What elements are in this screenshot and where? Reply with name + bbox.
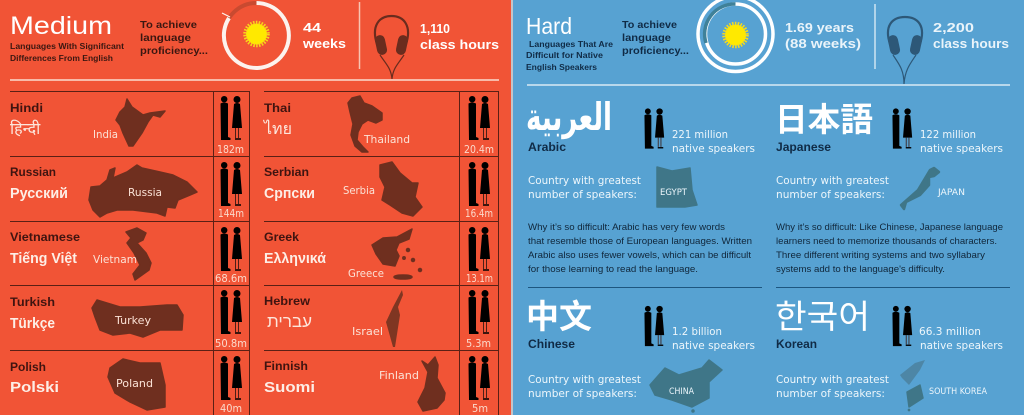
block: Arabic: that resemble those of European languages. Written <box>528 236 752 247</box>
text: to achieve proficiency: To achieve <box>140 19 197 31</box>
row: Serbian: Српски <box>264 185 315 202</box>
row: Thai: 20.4m <box>464 143 494 156</box>
block: Chinese: 1.2 billion <box>672 325 722 338</box>
row: Thai: Thai <box>264 103 291 115</box>
block: Arabic: العربية <box>526 95 612 139</box>
row: Hindi: Hindi <box>10 103 43 115</box>
stat: class hours <box>420 21 499 52</box>
block: Arabic: native speakers <box>672 142 755 155</box>
row: Vietnamese <box>10 227 247 285</box>
block: Korean: Korean <box>776 337 817 351</box>
row: Hebrew: Israel <box>352 326 383 338</box>
block: Arabic: Country with greatest <box>528 174 642 187</box>
row: Polish <box>10 356 242 415</box>
block: Arabic: number of speakers: <box>528 188 637 201</box>
row: Polish: Polski <box>10 379 59 396</box>
row: Hindi: 182m <box>217 143 244 156</box>
block: Korean: native speakers <box>920 339 1003 352</box>
stat: class hours: 1,110 <box>420 21 450 36</box>
block: Chinese: native speakers <box>672 339 755 352</box>
block: Chinese: Country with greatest <box>528 373 642 386</box>
block: Japanese: Country with greatest <box>776 174 890 187</box>
block: Korean: 66.3 million <box>919 325 981 338</box>
block: Chinese: number of speakers: <box>528 387 637 400</box>
stat: class hours: class hours <box>420 37 499 52</box>
row: Hindi: हिन्दी <box>10 119 41 138</box>
row: Serbian: Serbian <box>264 167 309 179</box>
stat: 44 weeks: weeks <box>302 36 346 51</box>
block: Japanese: 122 million <box>920 128 976 141</box>
subtitle: medium <box>10 42 124 63</box>
block: Japanese: Three different writing systems and two syllabary <box>776 250 985 261</box>
title: Medium: Medium <box>10 12 112 40</box>
panel: medium difficulty <box>0 0 511 415</box>
row: Turkish: Turkey <box>114 315 151 327</box>
row: Russian: Русский <box>10 185 68 202</box>
row: Russian <box>10 162 244 220</box>
row: Serbian: Serbia <box>343 185 375 197</box>
row: Thai: Thailand <box>363 134 410 146</box>
row: Vietnamese: 68.6m <box>215 272 247 285</box>
stat: 44 weeks: 44 <box>303 20 322 35</box>
row: Greek: Greek <box>264 232 300 244</box>
block: Chinese: 中文 <box>526 290 592 338</box>
block: Arabic: EGYPT <box>660 188 687 198</box>
row: Hebrew: 5.3m <box>466 337 491 350</box>
subtitle: hard: Languages That Are <box>529 40 614 49</box>
text: to achieve proficiency: To achieve <box>622 19 677 31</box>
row: Vietnamese: Vietnamese <box>10 232 80 244</box>
block: Japanese: systems add to the language's difficulty. <box>776 264 945 275</box>
row: Turkish: 50.8m <box>215 337 247 350</box>
row: Hebrew: Hebrew <box>264 296 310 308</box>
row: Thai: ไทย <box>262 119 292 138</box>
row: Finnish: Suomi <box>264 379 315 396</box>
stat: 44 weeks <box>302 20 346 51</box>
block: Arabic: Arabic <box>528 140 566 154</box>
text: to achieve proficiency: proficiency... <box>140 45 208 57</box>
row: Polish: Polish <box>10 362 46 374</box>
icon: progress ring with sun <box>222 3 289 68</box>
row: Vietnamese: Tiếng Việt <box>10 250 77 267</box>
row: Greek: 13.1m <box>466 272 493 285</box>
text: to achieve proficiency <box>140 19 208 57</box>
row: Serbian <box>264 162 493 220</box>
row: Russian: Russian <box>10 167 56 179</box>
row: Turkish: Turkish <box>10 297 55 309</box>
block: Japanese <box>775 93 1003 275</box>
subtitle: hard: English Speakers <box>526 63 598 72</box>
row: Turkish <box>10 290 247 350</box>
block: Arabic: for those learning to read the language. <box>528 264 698 275</box>
block: Japanese: number of speakers: <box>776 188 885 201</box>
row: Finnish <box>264 356 490 415</box>
block: Japanese: 日本語 <box>775 93 873 141</box>
block: Korean: Country with greatest <box>776 373 890 386</box>
block: Japanese: native speakers <box>920 142 1003 155</box>
block: Chinese: Chinese <box>528 337 575 351</box>
stat: class hours: 2,200 <box>933 20 974 35</box>
block: Arabic: Arabic also uses fewer vowels, which can be difficult <box>528 250 751 261</box>
text: to achieve proficiency: language <box>140 32 191 44</box>
block: Japanese: JAPAN <box>937 188 965 198</box>
stat: class hours <box>933 20 1009 51</box>
row: Turkish: Türkçe <box>10 315 55 332</box>
icon: headphones <box>887 17 923 84</box>
row: Greek <box>264 227 493 285</box>
stat: 88 weeks: 1.69 years <box>785 20 854 35</box>
icon: headphones <box>374 16 409 79</box>
subtitle: medium: Differences From English <box>10 54 113 63</box>
row: Hindi <box>10 96 244 156</box>
row: Hebrew: עברית <box>267 312 312 331</box>
block: Korean: SOUTH KOREA <box>929 387 988 397</box>
block: Korean: number of speakers: <box>776 387 885 400</box>
row: Hebrew <box>264 290 491 350</box>
row: Thai <box>262 96 494 156</box>
row: Russian: 144m <box>218 207 244 220</box>
row: Hindi: India <box>93 129 118 141</box>
block: Arabic <box>526 95 755 275</box>
stat: class hours: class hours <box>933 36 1009 51</box>
subtitle: medium: Languages With Significant <box>10 42 124 51</box>
text: to achieve proficiency: proficiency... <box>622 45 689 57</box>
block: Japanese: Japanese <box>776 140 831 154</box>
title: Hard: Hard <box>526 13 572 39</box>
text: to achieve proficiency: language <box>622 32 671 44</box>
subtitle: hard: Difficult for Native <box>526 51 604 60</box>
row: Finnish: Finnish <box>264 361 308 373</box>
text: to achieve proficiency <box>622 19 689 57</box>
row: Polish: Poland <box>116 378 153 390</box>
panel: hard difficulty <box>511 0 1024 415</box>
row: Polish: 40m <box>220 402 242 415</box>
row: Russian: Russia <box>128 187 162 199</box>
row: Finnish: Finland <box>379 370 419 382</box>
subtitle: hard <box>526 40 614 72</box>
stat: 88 weeks <box>785 20 861 51</box>
block: Chinese: CHINA <box>669 387 695 397</box>
row: Finnish: 5m <box>472 402 488 415</box>
block: Korean <box>775 290 1003 411</box>
block: Japanese: Why it’s so difficult: Like Chinese, Japanese language <box>776 222 1003 233</box>
row: Serbian: 16.4m <box>465 207 493 220</box>
row: Vietnamese: Vietnam <box>93 254 137 266</box>
block: Japanese: learners need to memorize thousands of characters. <box>776 236 997 247</box>
block: Arabic: Why it’s so difficult: Arabic has very few words <box>528 222 725 233</box>
row: Greek: Greece <box>348 268 384 280</box>
block: Arabic: 221 million <box>672 128 728 141</box>
block: Chinese <box>526 290 755 412</box>
row: Greek: Ελληνικά <box>264 250 327 267</box>
block: Korean: 한국어 <box>775 290 870 338</box>
icon: progress ring with sun <box>698 0 773 72</box>
stat: 88 weeks: (88 weeks) <box>785 36 861 51</box>
